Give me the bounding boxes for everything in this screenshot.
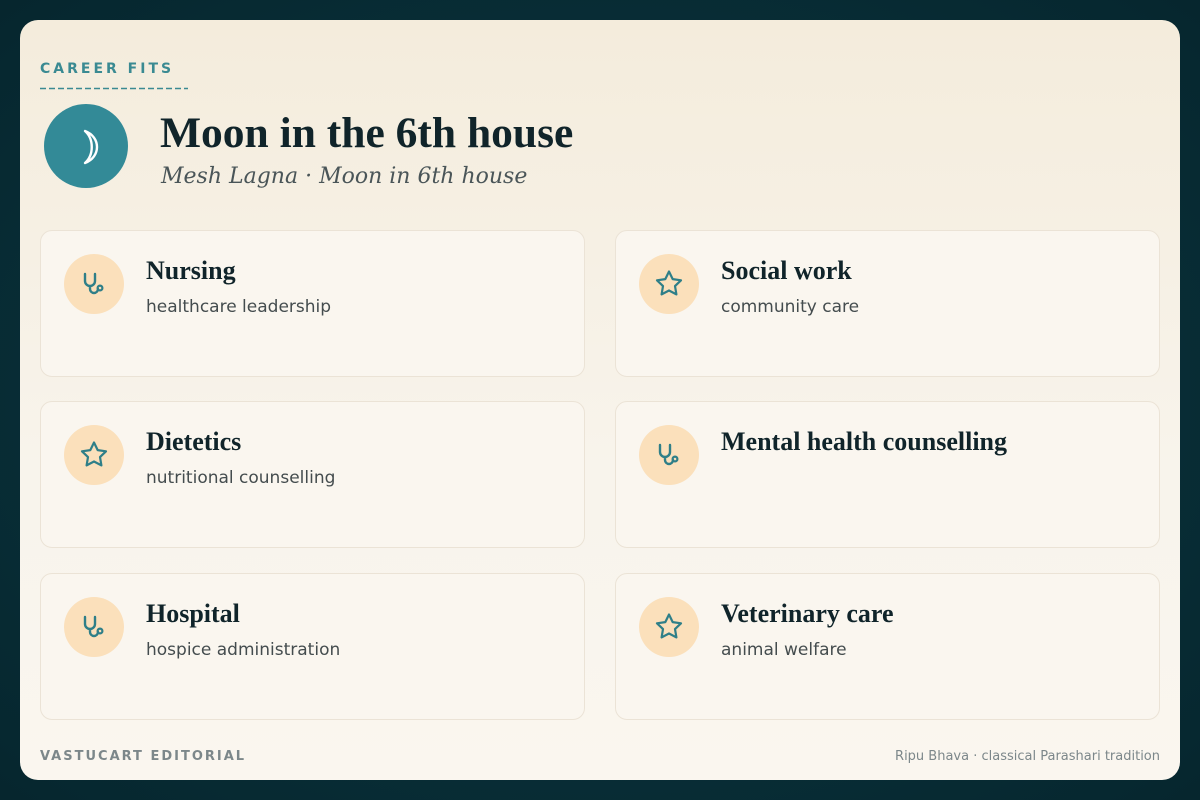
card: Nursing [40,230,585,377]
card: Dietetics: nutritional counselling [146,468,335,488]
footer right: Ripu Bhava · classical Parashari tradition [895,749,1160,764]
card: Nursing: healthcare leadership [146,297,331,317]
title: Moon in the 6th house [160,109,573,157]
card: Dietetics [40,401,585,548]
card: Hospital: hospice administration [146,640,340,660]
card: Dietetics: Dietetics [146,427,241,456]
card: Veterinary care: animal welfare [721,640,847,660]
card: Veterinary care [615,573,1160,720]
icon: star [639,597,699,657]
icon: stethoscope [639,425,699,485]
card: Social work: Social work [721,256,852,285]
icon: stethoscope [64,254,124,314]
card: Mental health counselling: Mental health counselling [721,427,1007,456]
eyebrow label: CAREER FITS [40,61,174,77]
card: Veterinary care: Veterinary care [721,599,894,628]
card: Mental health counselling [615,401,1160,548]
icon: stethoscope [64,597,124,657]
card: Hospital: Hospital [146,599,240,628]
icon: moon [44,104,128,188]
card: Social work [615,230,1160,377]
footer left: VASTUCART EDITORIAL [40,749,246,764]
card: Social work: community care [721,297,859,317]
icon: star [639,254,699,314]
card: Nursing: Nursing [146,256,236,285]
icon: star [64,425,124,485]
subtitle: Mesh Lagna · Moon in 6th house [161,164,527,189]
card: Hospital [40,573,585,720]
